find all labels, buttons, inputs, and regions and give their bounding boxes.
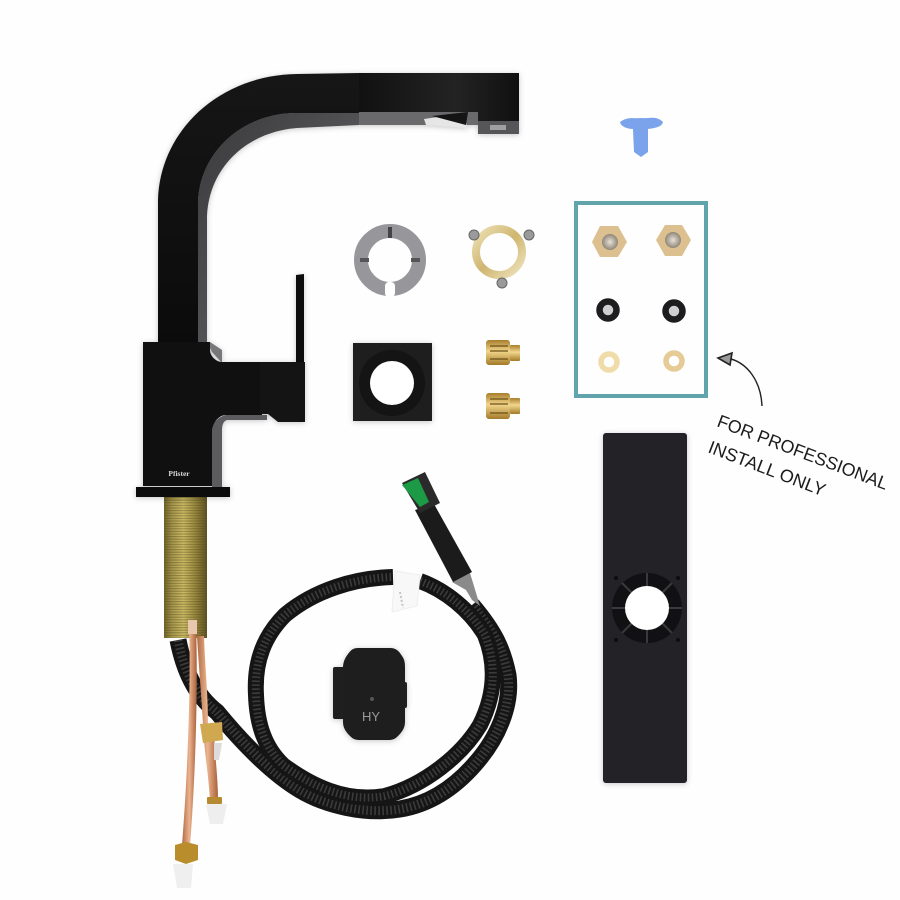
teal parts box xyxy=(576,203,706,396)
brass clamp ring xyxy=(469,229,534,288)
brass washer left xyxy=(601,354,617,370)
brass fitting bottom xyxy=(486,393,520,419)
brass washer right xyxy=(666,353,682,369)
base flange xyxy=(136,487,230,497)
faucet body xyxy=(143,342,262,486)
callout text: FOR PROFESSIONAL xyxy=(715,411,891,494)
handle base xyxy=(260,362,305,422)
copper supply lines xyxy=(173,620,227,888)
faucet body and spout xyxy=(136,73,519,497)
callout text: INSTALL ONLY xyxy=(706,437,828,500)
nozzle xyxy=(478,121,519,134)
metal ring washer xyxy=(360,227,420,297)
spout arm xyxy=(158,73,359,342)
blue aerator key xyxy=(620,118,663,157)
threaded brass shank xyxy=(164,497,207,638)
spray head connector xyxy=(402,472,480,606)
trigger xyxy=(424,113,467,128)
hose label xyxy=(392,571,420,612)
braided hose xyxy=(178,577,509,811)
square black gasket xyxy=(353,343,432,421)
black o-ring left xyxy=(600,302,616,318)
deck plate xyxy=(603,433,687,783)
sensor module xyxy=(333,648,407,740)
brass fitting top xyxy=(486,340,520,365)
brass nut left xyxy=(592,226,627,257)
handle lever xyxy=(296,274,304,362)
pull-out head xyxy=(359,73,519,134)
brand label: Pfister xyxy=(168,469,190,478)
sensor module: HY xyxy=(362,709,380,724)
spout underside xyxy=(198,113,359,342)
black o-ring right xyxy=(666,302,682,320)
gray body corner xyxy=(207,342,222,363)
head underside strip xyxy=(359,112,478,125)
arrow annotation xyxy=(718,353,762,406)
brass nut right xyxy=(656,225,691,256)
